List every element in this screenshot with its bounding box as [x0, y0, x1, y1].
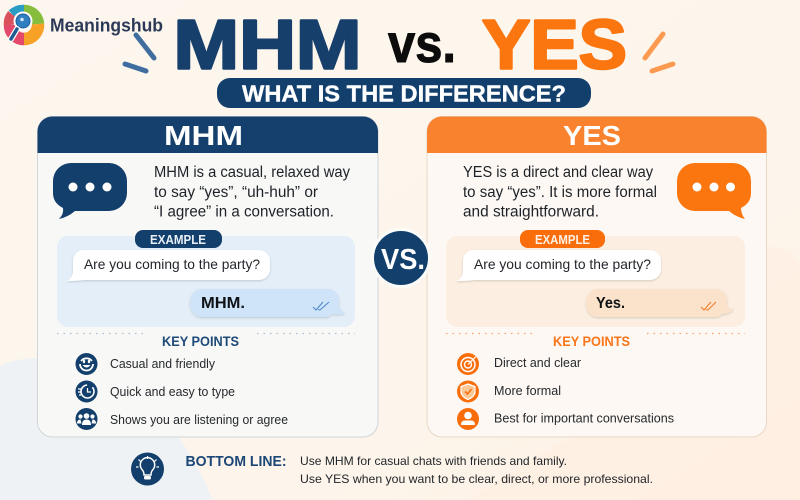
- message: reply Yes: [586, 289, 734, 317]
- key point: casual and friendly: Casual and friendly: [110, 357, 216, 371]
- key point: casual and friendly: [76, 353, 216, 375]
- heading: key points: KEY POINTS: [162, 334, 239, 349]
- panel header: MHM: MHM: [164, 120, 243, 151]
- key point: quick and easy: Quick and easy to type: [110, 385, 235, 399]
- title: vs.: vs.: [388, 14, 456, 74]
- bottom line: heading: BOTTOM LINE:: [186, 453, 286, 470]
- description: [463, 164, 657, 220]
- key point: important conversations: Best for important conversations: [494, 412, 674, 426]
- description: [154, 164, 350, 220]
- logo: Meaningshub: [10, 11, 163, 39]
- icon: chat bubble: [677, 163, 751, 219]
- description: MHM is a casual, relaxed way: [154, 164, 350, 181]
- bottom line: text: Use YES when you want to be clear, direct, or more professional.: [300, 472, 653, 486]
- key point: more formal: [457, 380, 561, 402]
- logo: Meaningshub: Meaningshub: [50, 16, 163, 36]
- title: YES: YES: [482, 6, 627, 84]
- accent strokes: left: [125, 35, 154, 71]
- example badge: [520, 230, 605, 248]
- description: to say “yes”. It is more formal: [463, 184, 657, 201]
- panel: YES: [427, 116, 766, 437]
- description: to say “yes”, “uh-huh” or: [154, 184, 318, 201]
- example badge: EXAMPLE: [535, 233, 590, 247]
- message: reply MHM: MHM.: [201, 295, 245, 312]
- VS badge: VS.: [381, 244, 425, 276]
- panel: MHM: [38, 116, 378, 437]
- message: question: [456, 250, 661, 281]
- key point: listening: [76, 408, 288, 430]
- message: reply Yes: Yes.: [596, 295, 625, 312]
- example badge: [135, 230, 222, 248]
- key point: important conversations: [457, 408, 674, 430]
- description: YES is a direct and clear way: [463, 164, 653, 181]
- panel header: YES: [427, 116, 766, 153]
- message: question: [67, 250, 270, 281]
- panel header: MHM: [38, 116, 378, 153]
- example panel: [57, 230, 355, 327]
- message: reply MHM: [190, 289, 345, 317]
- key point: direct and clear: Direct and clear: [494, 356, 581, 370]
- heading: key points: KEY POINTS: [553, 334, 630, 349]
- VS badge: [372, 230, 430, 286]
- description: and straightforward.: [463, 204, 599, 220]
- message: question: Are you coming to the party?: [474, 256, 651, 272]
- title: MHM: MHM: [174, 6, 362, 84]
- subtitle pill: WHAT IS THE DIFFERENCE?: [242, 80, 566, 106]
- icon: light bulb: [131, 452, 164, 486]
- panel header: YES: YES: [563, 120, 621, 151]
- icon: chat bubble: [53, 163, 127, 219]
- message: question: Are you coming to the party?: [84, 256, 260, 272]
- bottom line: text: [300, 454, 653, 486]
- key point: quick and easy: [76, 380, 235, 402]
- key point: listening: Shows you are listening or agree: [110, 413, 288, 427]
- key point: more formal: More formal: [494, 384, 561, 398]
- example badge: EXAMPLE: [150, 233, 206, 247]
- key point: direct and clear: [457, 353, 581, 375]
- bottom line: text: Use MHM for casual chats with friends and family.: [300, 454, 567, 468]
- description: “I agree” in a conversation.: [154, 204, 334, 220]
- accent strokes: right: [645, 34, 673, 71]
- example panel: [446, 230, 745, 327]
